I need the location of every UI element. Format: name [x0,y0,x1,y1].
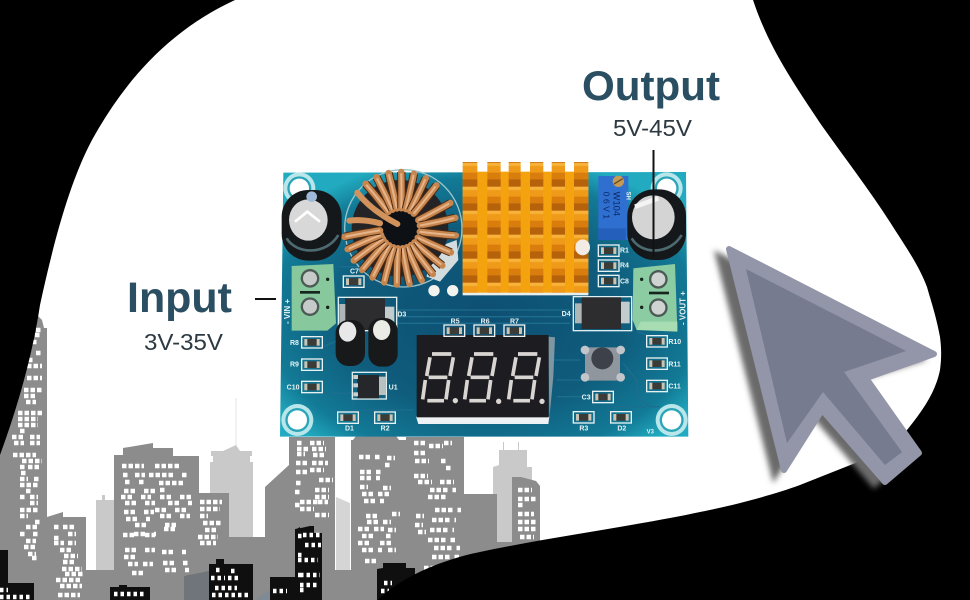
city skyline [0,316,540,600]
silkscreen labels: C7 [350,268,359,275]
trim potentiometer [598,176,631,240]
silkscreen labels: C11 [668,384,681,391]
circuit board photo [280,162,688,437]
input leader line [255,298,276,300]
silkscreen labels: C10 [287,384,300,391]
trim potentiometer: W104 [611,192,621,216]
output terminal block [633,264,677,332]
icon: mouse cursor arrow [717,249,934,486]
silkscreen labels: V3 [647,429,655,435]
silkscreen labels: U1 [389,384,398,391]
heading: Input: Input [127,274,232,322]
silkscreen labels: R5 [451,318,460,325]
trim potentiometer: 0 6 V 1 [601,192,611,219]
silkscreen labels: D4 [562,311,571,318]
silkscreen labels: R8 [290,340,299,347]
mounting holes [281,172,688,436]
lit windows [0,330,536,597]
label: input voltage range: 3V-35V [144,329,223,355]
silkscreen labels: C8 [620,278,629,285]
silkscreen labels: - VOUT + [679,291,688,325]
output capacitor [627,189,686,260]
three digit LED display [416,335,555,424]
mid-grey buildings [0,316,540,600]
black background shape: left [0,0,235,455]
dark foreground buildings [0,526,415,600]
small electrolytic capacitors [336,318,398,367]
silkscreen labels: R4 [620,262,629,269]
copper traces [300,267,683,410]
silkscreen labels: R11 [668,362,681,369]
silkscreen labels: R2 [381,426,390,433]
push button [581,346,625,382]
label: output voltage range: 5V-45V [613,115,692,141]
surface mount components [302,245,667,423]
PCB [280,172,688,437]
holes below the inductor [428,285,458,296]
input capacitor [282,190,342,261]
output leader line [652,150,654,257]
silkscreen labels: R7 [510,318,519,325]
toroid inductor [344,170,462,287]
black background shape: right and bottom [378,0,970,600]
heading: Output: Output [582,62,720,109]
silkscreen labels: - VIN + [283,299,292,324]
silkscreen labels: R9 [290,362,299,369]
diode D3 [338,297,397,331]
input terminal block [292,264,336,331]
diode D4 [573,297,632,331]
silkscreen labels: D1 [345,426,354,433]
silkscreen labels: R6 [481,318,490,325]
silkscreen labels: D2 [617,426,626,433]
silkscreen labels: R1 [620,248,629,255]
light background towers [96,398,532,577]
silkscreen labels: R10 [668,339,681,346]
silkscreen labels: D3 [397,312,406,319]
heatsink [463,162,590,295]
regulator chip U1 [352,372,386,399]
silkscreen labels [283,248,688,435]
accent shapes at the foot of the skyline [184,571,270,600]
trim potentiometer: SH [625,192,631,200]
silkscreen labels: R3 [579,426,588,433]
silkscreen labels: C3 [582,394,591,401]
